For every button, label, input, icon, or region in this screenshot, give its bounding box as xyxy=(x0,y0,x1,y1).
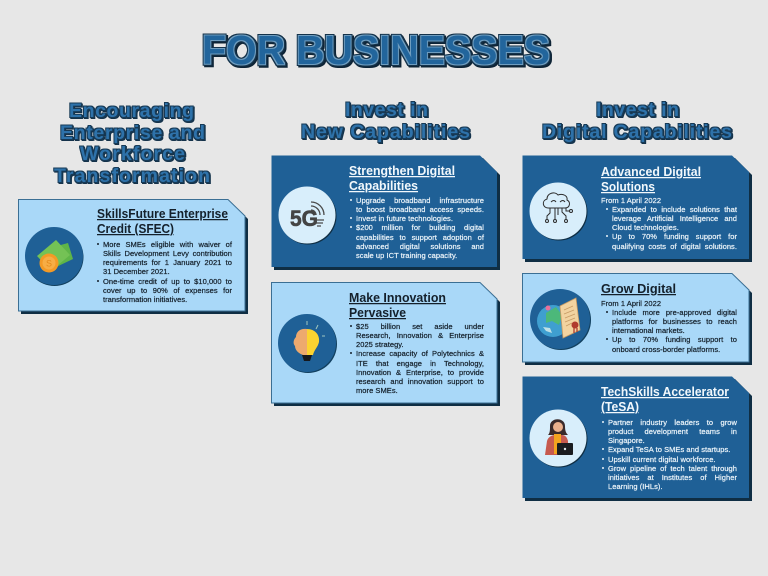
date note: From 1 April 2022 xyxy=(601,298,661,308)
bullet list: onboard cross-border platforms. xyxy=(612,344,720,354)
bullet list: capabilities to support adoption of xyxy=(356,232,484,242)
panel heading: Strengthen Digital xyxy=(349,164,455,178)
bullet list: Increase capacity of Polytechnics & xyxy=(356,349,484,358)
bullet list: Upgrade broadband infrastructure xyxy=(356,196,484,204)
icon: brain light bulb xyxy=(278,314,337,373)
bullet list: to boost broadband access speeds. xyxy=(356,205,484,214)
heading: invest in digital capabilities: Invest in xyxy=(596,99,679,121)
bullet list: leverage Artificial Intelligence and xyxy=(612,214,737,223)
icon: woman with laptop xyxy=(530,410,588,468)
icon: AI cloud xyxy=(530,182,588,240)
bullet list: Grow pipeline of tech talent through xyxy=(608,464,737,473)
bullet list: transformation initiatives. xyxy=(103,295,187,304)
bullet list: advanced digital solutions and xyxy=(356,242,484,251)
bullet list xyxy=(606,204,738,251)
panel heading: (TeSA) xyxy=(601,400,639,414)
bullet list: Invest in future technologies. xyxy=(356,214,453,223)
panel heading: Grow Digital xyxy=(601,282,676,296)
bullet list: research and innovation support to xyxy=(356,377,484,386)
heading: enterprise and workforce transformation: Enterprise and xyxy=(60,122,205,144)
heading: invest in new capabilities: New Capabilities xyxy=(301,121,470,143)
title: FOR BUSINESSES xyxy=(202,27,550,73)
bullet list: Singapore. xyxy=(608,436,645,445)
bullet list xyxy=(350,322,484,395)
panel heading: Solutions xyxy=(601,180,655,194)
bullet list xyxy=(602,418,738,491)
bullet list: scale up ICT training capacity. xyxy=(356,251,457,260)
bullet list: 31 December 2021. xyxy=(103,267,170,276)
bullet list: Include more pre-approved digital xyxy=(612,308,737,316)
bullet list: $25 billion set aside under xyxy=(356,322,484,330)
bullet list: cover up to 90% of expenses for xyxy=(103,286,232,295)
bullet list: Research, Innovation & Enterprise xyxy=(356,331,484,340)
panel: SkillsFuture Enterprise Credit: SkillsFuture Enterprise xyxy=(97,207,228,221)
panel heading xyxy=(349,164,455,193)
panel: Strengthen Digital Capabilities xyxy=(272,156,500,270)
heading: enterprise and workforce transformation: Transformation xyxy=(54,165,210,187)
bullet list: 2025 strategy. xyxy=(356,340,404,349)
heading: invest in new capabilities: Invest in xyxy=(345,99,428,121)
icon: money and coin xyxy=(25,227,84,286)
bullet list: qualifying costs of digital solutions. xyxy=(612,242,737,250)
bullet list: platforms for businesses to reach xyxy=(612,317,737,326)
panel: TechSkills Accelerator xyxy=(522,376,752,501)
icon: 5G: 5G xyxy=(290,206,318,231)
bullet list: One-time credit of up to $10,000 to xyxy=(103,276,232,286)
bullet list: $200 million for building digital xyxy=(356,223,484,232)
bullet list: Expanded to include solutions that xyxy=(612,204,737,214)
heading: enterprise and workforce transformation xyxy=(54,100,210,187)
bullet list: international markets. xyxy=(612,326,685,335)
panel: Grow Digital xyxy=(522,273,752,365)
bullet list: Cloud technologies. xyxy=(612,223,679,232)
panel: Advanced Digital Solutions xyxy=(522,156,752,262)
panel heading xyxy=(349,291,446,320)
icon: 5G xyxy=(278,186,336,244)
heading: invest in new capabilities xyxy=(301,99,470,143)
heading: invest in digital capabilities: Digital Capabilities xyxy=(542,121,732,143)
panel heading: Make Innovation xyxy=(349,291,446,305)
bullet list: more SMEs. xyxy=(356,386,398,395)
bullet list: ITE that engage in Technology, xyxy=(356,358,484,368)
panel heading: TechSkills Accelerator xyxy=(601,385,729,399)
bullet list xyxy=(350,196,484,260)
panel heading xyxy=(601,165,701,194)
bullet list: Up to 70% funding support for xyxy=(612,232,737,241)
bullet list: product development teams in xyxy=(608,427,737,436)
bullet list: requirements for 1 January 2021 to xyxy=(103,258,232,267)
icon: globe and certificate xyxy=(530,289,591,350)
bullet list: Up to 70% funding support to xyxy=(612,335,737,344)
bullet list: Skills Development Levy contribution xyxy=(103,249,232,258)
bullet list xyxy=(606,308,737,354)
page headings xyxy=(53,27,734,187)
date note: From 1 April 2022 xyxy=(601,196,661,204)
icon: money and coin: S xyxy=(46,258,52,268)
heading: enterprise and workforce transformation: Encouraging xyxy=(69,100,194,122)
bullet list: initiatives at Institutes of Higher xyxy=(608,473,737,482)
bullet list xyxy=(97,240,232,304)
panel heading xyxy=(97,207,228,236)
panel heading: Pervasive xyxy=(349,306,406,320)
bullet list: More SMEs eligible with waiver of xyxy=(103,240,232,248)
heading: enterprise and workforce transformation: Workforce xyxy=(80,143,185,165)
bullet list: Innovation & Enterprise, to provide xyxy=(356,368,484,377)
bullet list: Partner industry leaders to grow xyxy=(608,418,737,426)
bullet list: Upskill current digital workforce. xyxy=(608,454,716,464)
panel heading: Advanced Digital xyxy=(601,165,701,179)
bullet list: Learning (IHLs). xyxy=(608,482,663,491)
panel heading: Credit (SFEC) xyxy=(97,222,174,236)
bullet list: Expand TeSA to SMEs and startups. xyxy=(608,445,730,454)
panel heading: Capabilities xyxy=(349,179,418,193)
heading: invest in digital capabilities xyxy=(542,99,732,143)
panel heading xyxy=(601,385,729,414)
panel: Make Innovation Pervasive xyxy=(271,282,500,406)
panel: SkillsFuture Enterprise Credit xyxy=(18,199,248,314)
